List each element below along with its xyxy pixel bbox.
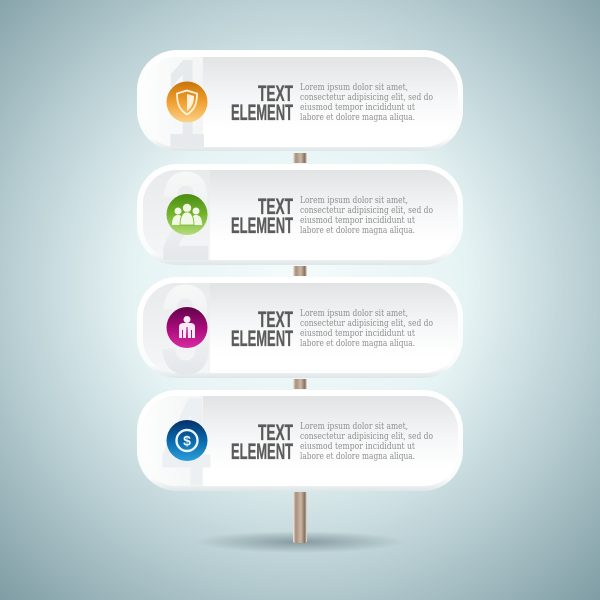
panel 1 [137,33,463,174]
icon: shield [166,82,208,122]
panel 2 [137,146,463,287]
icon: person [166,307,208,348]
heading: TEXT [258,307,293,332]
heading: ELEMENT [231,439,293,464]
body text: Lorem ipsum dolor sit amet, [300,422,408,432]
body text: Lorem ipsum dolor sit amet, [300,83,408,93]
body text: Lorem ipsum dolor sit amet, [300,309,408,319]
number 2: 2 [160,146,212,287]
body text: consectetur adipisicing elit, sed do [300,319,433,329]
heading [231,307,293,351]
panel 3 [137,259,463,400]
heading: TEXT [258,420,293,445]
panel 4 [137,371,463,512]
heading [231,420,293,464]
body text [300,83,433,123]
number 3: 3 [160,259,212,400]
heading: TEXT [258,81,293,106]
icon: dollar coin [166,420,208,461]
body text: labore et dolore magna aliqua. [300,113,415,123]
body text: consectetur adipisicing elit, sed do [300,206,433,216]
ground shadow [195,531,405,553]
body text: consectetur adipisicing elit, sed do [300,93,433,103]
heading: ELEMENT [231,326,293,351]
body text: Lorem ipsum dolor sit amet, [300,196,408,206]
body text: eiusmod tempor incididunt ut [300,442,415,452]
body text [300,309,433,349]
body text [300,196,433,236]
number 4: 4 [161,371,211,512]
body text: labore et dolore magna aliqua. [300,452,415,462]
body text: consectetur adipisicing elit, sed do [300,432,433,442]
icon: dollar coin: $ [183,432,191,448]
heading: TEXT [258,194,293,219]
body text [300,422,433,462]
heading [231,81,293,125]
heading: ELEMENT [231,100,293,125]
body text: eiusmod tempor incididunt ut [300,329,415,339]
connector posts [293,153,307,543]
heading: ELEMENT [231,213,293,238]
body text: eiusmod tempor incididunt ut [300,103,415,113]
number 1: 1 [166,33,206,174]
body text: labore et dolore magna aliqua. [300,339,415,349]
icon: team [166,194,208,235]
body text: eiusmod tempor incididunt ut [300,216,415,226]
heading [231,194,293,238]
body text: labore et dolore magna aliqua. [300,226,415,236]
